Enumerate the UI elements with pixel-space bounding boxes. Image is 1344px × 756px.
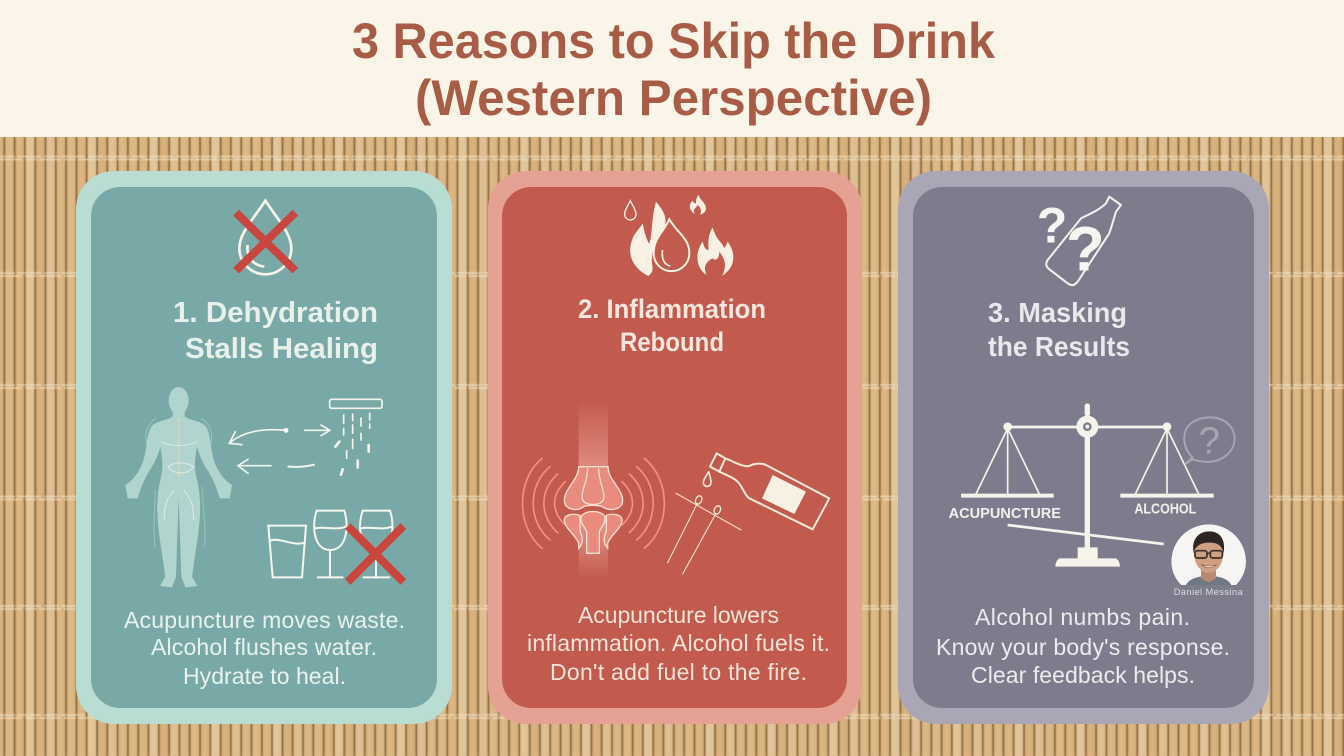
icon: shower head with drops — [330, 399, 382, 475]
heading: dehydration stalls healing: Stalls Healing — [185, 333, 378, 365]
arrows between body and shower — [229, 425, 330, 473]
panel: dehydration — [76, 171, 452, 724]
body text: Acupuncture moves waste. — [124, 607, 405, 633]
speech bubble with question mark — [1184, 417, 1235, 464]
title: 3 Reasons to Skip the Drink — [352, 13, 995, 69]
heading: masking the results: the Results — [988, 331, 1130, 362]
illustration: balance scale — [949, 406, 1214, 567]
heading: inflammation rebound: 2. Inflammation — [578, 294, 766, 324]
panel: masking — [898, 171, 1269, 724]
title: (Western Perspective) — [415, 70, 932, 126]
title banner — [0, 0, 1344, 137]
body text: inflammation. Alcohol fuels it. — [527, 630, 830, 656]
scale labels: ALCOHOL — [1134, 501, 1196, 517]
body text: Alcohol flushes water. — [151, 634, 377, 660]
heading: inflammation rebound — [578, 294, 766, 357]
body text — [936, 604, 1230, 688]
body text: Hydrate to heal. — [183, 663, 346, 689]
icon: crossed-out water drop — [236, 201, 295, 274]
body text: Don't add fuel to the fire. — [550, 659, 807, 685]
portrait: Daniel Messina — [1171, 524, 1246, 599]
panel: inflammation — [488, 171, 862, 724]
icon: bottle with question marks: ? — [1037, 198, 1067, 254]
heading: masking the results: 3. Masking — [988, 297, 1127, 328]
icon: bottle with question marks: ? — [1066, 215, 1105, 285]
illustration: human body with meridians — [125, 387, 232, 587]
portrait: Daniel Messina: Daniel Messina — [1174, 587, 1243, 597]
heading: dehydration stalls healing: 1. Dehydration — [173, 297, 378, 329]
illustration: inflamed knee joint — [522, 400, 664, 578]
icon: bottle with question marks — [1037, 197, 1121, 285]
body text: Alcohol numbs pain. — [975, 604, 1190, 630]
heading: dehydration stalls healing — [173, 297, 378, 365]
body text — [527, 602, 830, 685]
scale labels: ACUPUNCTURE — [949, 506, 1061, 522]
speech bubble with question mark: ? — [1199, 419, 1220, 462]
scale labels — [949, 501, 1196, 522]
icon: flames and drops — [625, 195, 733, 276]
title — [352, 13, 995, 126]
icon: tipped bottle over needles — [668, 453, 829, 574]
heading: masking the results — [988, 297, 1130, 362]
body text: Acupuncture lowers — [578, 602, 779, 628]
heading: inflammation rebound: Rebound — [620, 327, 724, 357]
body text — [124, 607, 405, 689]
icon: water glass and crossed-out wine glasses — [268, 511, 403, 582]
body text: Clear feedback helps. — [971, 662, 1195, 688]
body text: Know your body's response. — [936, 634, 1230, 660]
